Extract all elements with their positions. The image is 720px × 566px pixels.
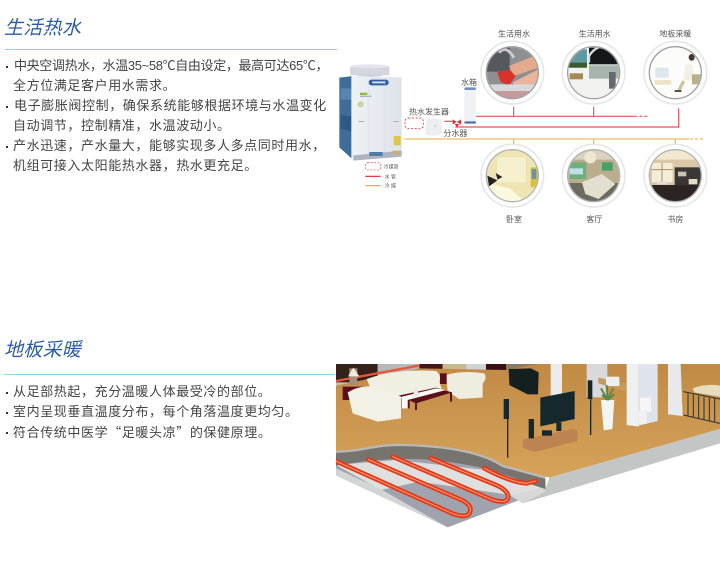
- text block: hot water bullet list: 产水迅速，产水量大，能够实现多人多点同时用水，: [13, 138, 326, 153]
- icon: water distributor: [443, 119, 467, 138]
- circle photo: person seated: [644, 41, 707, 104]
- circle photo: study: [644, 144, 707, 207]
- icon: water tank: [461, 77, 477, 124]
- text block: hot water bullet list: 机组可接入太阳能热水器，热水更充足。: [13, 158, 258, 173]
- icon: water distributor: 分水器: [443, 128, 467, 138]
- text block: hot water bullet list: [6, 58, 328, 173]
- text block: floor heating bullet list: [6, 384, 299, 441]
- room labels: 客厅: [586, 214, 602, 224]
- circle photo: kitchen sink: [562, 41, 625, 104]
- back walls: [336, 364, 536, 386]
- circle photo: living room: [562, 144, 625, 207]
- heading: 地板采暖: 地板采暖: [4, 340, 81, 361]
- heating pipes: [333, 457, 536, 516]
- room labels: 地板采暖: [659, 28, 691, 38]
- illustration: floor heating cutaway: [333, 364, 720, 527]
- upper right railing: [683, 385, 720, 423]
- diagram: hot water system: [339, 28, 707, 224]
- plant in white vase: [601, 385, 614, 430]
- icon: hot water generator: 热水发生器: [409, 107, 449, 117]
- pipes: orange refrigerant lines: [404, 139, 703, 144]
- dresser: [509, 368, 539, 394]
- icon: water tank: 水箱: [461, 77, 477, 87]
- room labels: 卧室: [506, 214, 522, 224]
- sublayer base: [336, 452, 546, 527]
- slab edge: [523, 429, 720, 503]
- legend: 冷媒管: [384, 163, 399, 170]
- room labels: 书房: [667, 214, 683, 224]
- text block: hot water bullet list: 中央空调热水，水温35~58℃自由设定，最高可达65℃，: [14, 58, 328, 73]
- insulation reflective layer: [336, 460, 544, 495]
- wood floor: [336, 364, 720, 478]
- television: [529, 391, 575, 438]
- white columns and bathroom: [551, 364, 683, 427]
- text block: floor heating bullet list: 室内呈现垂直温度分布，每个角落温度更均匀。: [13, 404, 299, 419]
- cross-section layer: [336, 446, 545, 489]
- tv stand: [523, 429, 578, 452]
- heading: 生活热水: 生活热水: [4, 18, 81, 39]
- legend: 水 管: [385, 173, 396, 180]
- icon: hot water generator: [405, 107, 449, 136]
- room labels: [498, 28, 691, 224]
- text block: floor heating bullet list: 符合传统中医学“足暖头凉”的保健原理。: [13, 422, 271, 441]
- pipes: red water lines: [444, 107, 679, 127]
- legend: 冷 媒: [385, 183, 396, 190]
- room labels: 生活用水: [498, 28, 530, 38]
- room labels: 生活用水: [579, 28, 611, 38]
- text block: hot water bullet list: 电子膨胀阀控制，确保系统能够根据环境与水温变化: [14, 98, 327, 113]
- legend: [365, 163, 399, 190]
- floor speakers: [504, 380, 592, 458]
- sofas and coffee table: [343, 368, 486, 422]
- text block: hot water bullet list: 自动调节，控制精准，水温波动小。: [13, 118, 231, 133]
- text block: hot water bullet list: 全方位满足客户用水需求。: [13, 78, 176, 93]
- icon: outdoor unit: [339, 64, 402, 161]
- circle photo: washing vegetables: [481, 41, 544, 104]
- circle photo: bedroom: [481, 144, 544, 207]
- text block: floor heating bullet list: 从足部热起，充分温暖人体最受冷的部位。: [13, 384, 271, 399]
- red baseboard pipe: [336, 366, 419, 381]
